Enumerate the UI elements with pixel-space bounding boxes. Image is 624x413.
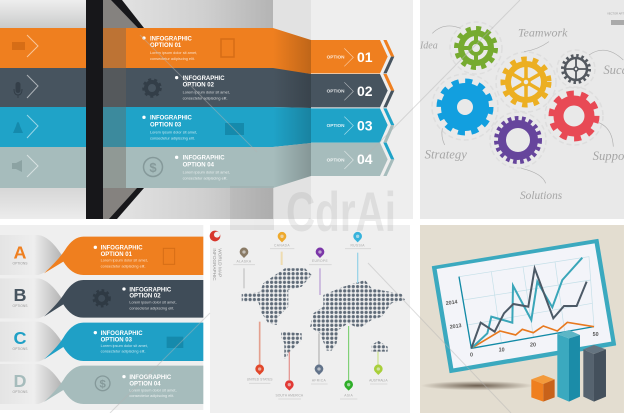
line: dark series (471, 268, 587, 348)
icon: gear dark (144, 80, 160, 96)
letter: A: A (13, 243, 26, 263)
mirror frame post (86, 0, 103, 219)
label: Idea: Idea (419, 40, 438, 51)
chevron: 03: OPTION (327, 123, 345, 128)
icon: briefcase (167, 337, 183, 348)
text: option 03: OPTION 03 (150, 123, 182, 129)
fold shading right (273, 28, 311, 188)
pin: Australia: AUSTRALIA (369, 378, 388, 382)
text: ribbon A: Lorem ipsum dolor sit amet, (101, 259, 148, 263)
text: ribbon B: OPTION 02 (129, 294, 161, 300)
icon: dollar (144, 158, 162, 176)
letter: D: OPTIONS (13, 390, 28, 394)
text: ribbon A: consectetur adipiscing elit. (101, 264, 146, 268)
icon: calculator (221, 39, 234, 57)
text: option 01: consectetur adipiscing elit. (150, 57, 195, 61)
ribbon: grey band (0, 143, 311, 188)
text: ribbon D: INFOGRAPHIC (129, 375, 172, 381)
pin: Africa (311, 333, 328, 384)
chevron: 01: OPTION (327, 55, 345, 60)
icon: dollar (95, 376, 110, 391)
text: ribbon B: INFOGRAPHIC (129, 287, 172, 293)
text: option 02: Lorem ipsum dolor sit amet, (183, 91, 230, 95)
text: ribbon D: consectetur adipiscing elit. (129, 394, 174, 398)
chevron: 01: 01 (357, 49, 373, 65)
logo subtitle: INFOGRAPHIC (212, 248, 217, 281)
axes (459, 277, 594, 348)
logo (210, 231, 220, 241)
text: ribbon C (94, 331, 148, 354)
panel: dotted world map (210, 225, 410, 413)
pin: Alaska (233, 248, 255, 288)
icon: briefcase (225, 123, 244, 135)
text: option 02: consectetur adipiscing elit. (183, 97, 228, 101)
chevron: 04 (311, 143, 394, 176)
bar: dark (583, 345, 606, 402)
gear: purple (496, 118, 540, 162)
pin: Asia: ASIA (344, 393, 354, 397)
pin: South America: SOUTH AMERICA (276, 393, 304, 397)
letter: B: OPTIONS (13, 304, 28, 308)
panel: line and bar chart (420, 225, 624, 413)
icon: speaker (12, 160, 22, 172)
ribbon: B (44, 280, 203, 318)
text: option 03: INFOGRAPHIC (150, 116, 193, 122)
icon: envelope (12, 42, 25, 50)
gear: blue (440, 82, 490, 132)
letter: B: B (13, 285, 26, 305)
axis labels: 10 (499, 348, 505, 354)
watermark diagonal lines (110, 0, 520, 413)
pin: United States: UNITED STATES (247, 378, 273, 382)
small caption box (611, 20, 624, 25)
ribbon: orange band (0, 28, 311, 74)
pin: Europe (309, 248, 332, 295)
text: ribbon A (94, 246, 148, 268)
chevron tabs (311, 40, 394, 176)
mirror glass bottom (103, 188, 143, 219)
text: option 01: OPTION 01 (150, 43, 182, 49)
line: teal series (471, 258, 582, 348)
gear labels (419, 12, 624, 202)
text: ribbon D: OPTION 04 (129, 381, 161, 387)
letter: A: OPTIONS (13, 261, 28, 265)
mirror frame diagonal top (111, 0, 144, 28)
text: option 03 (142, 116, 197, 141)
pin: Russia: RUSSIA (350, 243, 365, 247)
chevron: 02: OPTION (327, 89, 345, 94)
chevron: 02: 02 (357, 83, 373, 99)
tab C (0, 322, 62, 362)
mirror frame diagonal bottom (109, 188, 144, 219)
bar: orange cube (531, 375, 555, 402)
panel: folded ribbon infographic (0, 0, 413, 219)
watermark logo (230, 186, 274, 230)
logo title: WORLD MAP (217, 248, 222, 277)
gear: green (456, 28, 496, 68)
line: orange series (471, 322, 594, 348)
ribbon: slate band (0, 68, 311, 108)
text: option 03: consectetur adipiscing elit. (150, 137, 195, 141)
text: option 01: INFOGRAPHIC (150, 36, 193, 42)
panel: gears (419, 0, 624, 219)
pin: Africa: AFRICA (312, 378, 327, 382)
label: Strategy: Strategy (425, 147, 467, 161)
chevron: 03 (311, 108, 394, 143)
text: option 01: Lorem ipsum dolor sit amet, (150, 51, 197, 55)
text: option 01 (142, 36, 197, 61)
text: option 04: INFOGRAPHIC (183, 156, 225, 162)
axis labels: 2014 (445, 299, 458, 307)
bar: teal tall (557, 330, 580, 402)
chart board (432, 239, 616, 373)
ribbon: A (44, 237, 203, 275)
text: option 03: Lorem ipsum dolor sit amet, (150, 131, 197, 135)
shadow (421, 381, 534, 390)
text: ribbon C: consectetur adipiscing elit. (101, 350, 146, 354)
chevron: 04: 04 (357, 151, 373, 167)
connector arrows (432, 26, 623, 183)
grid (459, 257, 594, 348)
icon: bell (13, 122, 23, 133)
text: option 04: consectetur adipiscing elit. (183, 177, 228, 181)
text: option 04: Lorem ipsum dolor sit amet, (183, 171, 230, 175)
text: ribbon B: consectetur adipiscing elit. (129, 306, 174, 310)
text: ribbon A: OPTION 01 (101, 252, 133, 258)
gear: yellow (503, 59, 549, 105)
tab A (0, 235, 62, 275)
pin: Canada (270, 232, 294, 265)
text: ribbon D: Lorem ipsum dolor sit amet, (129, 388, 177, 392)
watermark (230, 180, 396, 243)
tab B (0, 278, 62, 318)
ribbon: D (44, 366, 203, 404)
text: ribbon C: Lorem ipsum dolor sit amet, (101, 344, 148, 348)
text: option 02 (175, 76, 230, 101)
chevron: 01 (311, 40, 394, 73)
gear halos (432, 22, 603, 168)
axis labels: 2013 (449, 323, 462, 331)
label: Solutions: Solutions (520, 190, 563, 202)
axis labels: 0 (470, 353, 473, 359)
tab D (0, 364, 62, 404)
icon: calculator (163, 248, 175, 264)
map: continents (242, 268, 405, 358)
icon: dollar: $ (149, 160, 157, 175)
mirror glass overlay (103, 28, 126, 188)
ribbon: C (44, 323, 203, 361)
axis labels (445, 299, 599, 359)
icon: microphone (14, 82, 22, 98)
text: ribbon D (122, 375, 177, 398)
chevron: 03: 03 (357, 117, 373, 133)
pin: Alaska: ALASKA (237, 259, 252, 263)
pin: United States (247, 322, 273, 383)
text: option 04: OPTION 04 (183, 163, 215, 169)
axis labels: 50 (593, 332, 599, 338)
ribbon: blue band (0, 107, 311, 147)
chart board face (437, 243, 611, 368)
watermark text: CdrAi (286, 180, 396, 243)
mirror glass top (103, 0, 143, 28)
pin: Europe: EUROPE (312, 259, 328, 263)
letter: D: D (13, 371, 26, 391)
label: Teamwork: Teamwork (518, 26, 568, 40)
letter: C: C (13, 328, 26, 348)
text: ribbon B: Lorem ipsum dolor sit amet, (129, 301, 177, 305)
text: ribbon C: OPTION 03 (101, 337, 133, 343)
chevron: 02 (311, 74, 394, 107)
text: option 02: OPTION 02 (183, 83, 215, 89)
pin: South America (276, 352, 304, 399)
pin: Russia (345, 232, 371, 283)
left chevrons (27, 35, 38, 177)
small caption: VECTOR ART (607, 12, 624, 16)
panel: twisted ribbon options (0, 225, 203, 410)
icon: gear (94, 290, 110, 306)
gear: grey (562, 56, 590, 82)
letter: C: OPTIONS (13, 347, 28, 351)
pin: Asia (340, 326, 357, 399)
chevron: 04: OPTION (327, 157, 345, 162)
pin: Australia (369, 352, 388, 384)
icon: dollar: $ (100, 379, 107, 391)
text: option 02: INFOGRAPHIC (183, 76, 225, 82)
gear: red (552, 94, 596, 138)
text: option 04 (175, 156, 230, 181)
text: ribbon B (122, 287, 177, 310)
text: ribbon A: INFOGRAPHIC (101, 246, 143, 252)
pin: Canada: CANADA (274, 243, 290, 247)
text: ribbon C: INFOGRAPHIC (101, 331, 143, 337)
axis labels: 20 (530, 343, 536, 349)
